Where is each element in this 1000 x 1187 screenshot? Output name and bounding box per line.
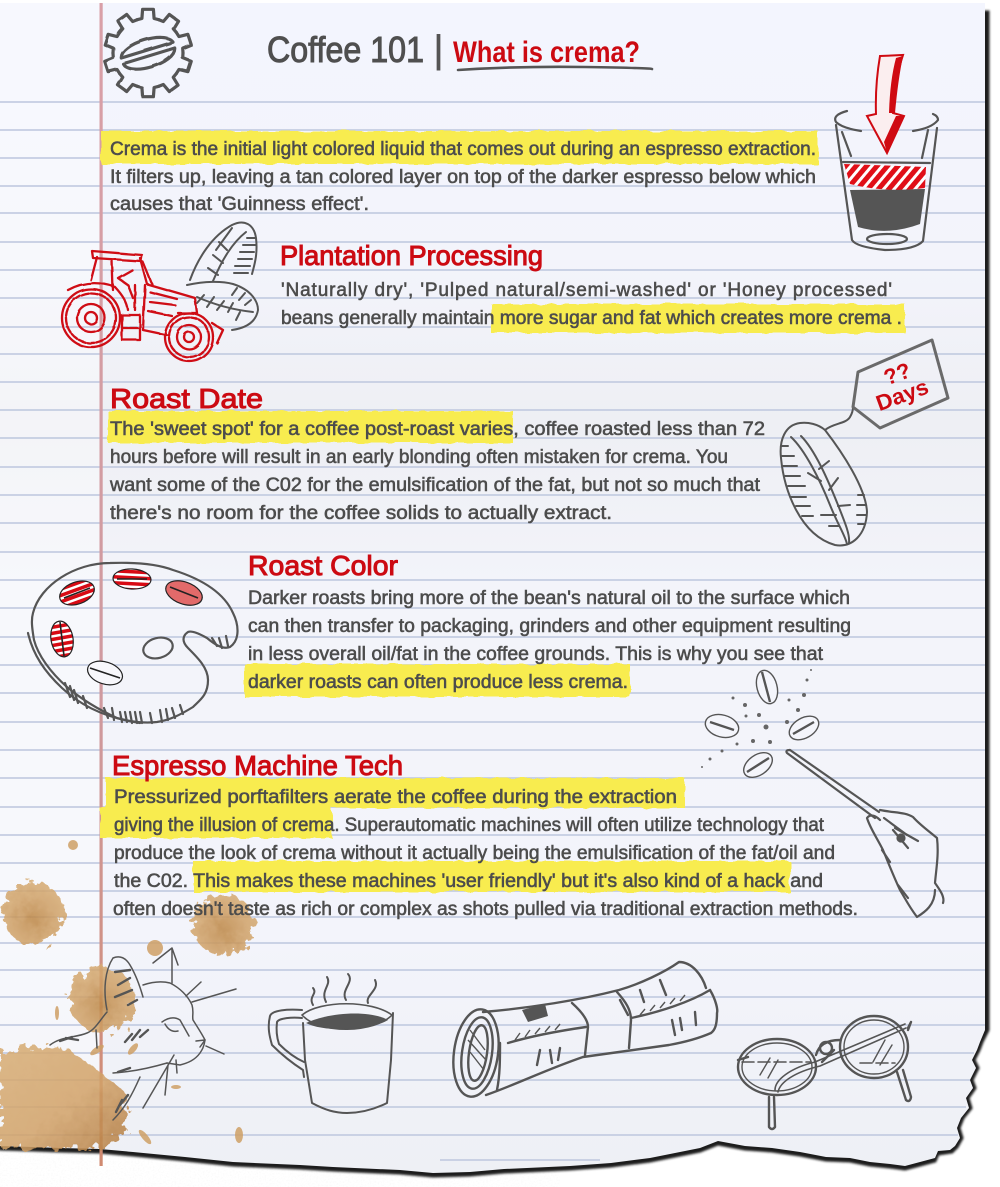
text block: roast color: can then transfer to packaging, grinders and other equipment resulting [248, 616, 851, 637]
icon: bean with days tag [781, 340, 948, 545]
icon: bean with days tag: Days [872, 374, 932, 416]
icon: eyeglasses [738, 1016, 911, 1129]
heading: roast color: Roast Color [248, 550, 398, 581]
text block: crema definition: Crema is the initial light colored liquid that comes out during an espresso extraction. [110, 139, 816, 160]
text block: roast color: darker roasts can often produce less crema. [248, 672, 628, 693]
title: Coffee 101 [267, 29, 424, 70]
icon: coffee bean gear [103, 9, 193, 97]
coffee stains [0, 840, 254, 1148]
icon: espresso shot glass with arrow [835, 55, 938, 250]
icon: cat [50, 948, 236, 1120]
icon: scattered coffee beans [701, 668, 823, 782]
text block: roast date [109, 419, 765, 524]
text block: plantation processing [281, 280, 902, 329]
text block: espresso machine tech: giving the illusion of crema. Superautomatic machines will often utilize technology that [114, 815, 825, 836]
icon: tractor and coffee beans [62, 223, 258, 361]
text block: espresso machine tech: the C02. This makes these machines 'user friendly' but it's also kind of a hack and [114, 871, 823, 892]
text block: espresso machine tech: Pressurized porftafilters aerate the coffee during the extraction [114, 787, 677, 808]
text block: espresso machine tech: often doesn't taste as rich or complex as shots pulled via traditional extraction methods. [113, 899, 858, 920]
text block: roast date: hours before will result in an early blonding often mistaken for crema. You [110, 447, 728, 468]
text block: roast date: there's no room for the coffee solids to actually extract. [110, 503, 612, 524]
title: What is crema? [453, 36, 640, 69]
heading: plantation processing: Plantation Processing [280, 240, 543, 271]
icon: paint palette with beans [28, 563, 238, 723]
text block: plantation processing: beans generally maintain more sugar and fat which creates more crema . [281, 308, 902, 329]
title [267, 29, 652, 71]
text block: roast color: in less overall oil/fat in the coffee grounds. This is why you see that [248, 644, 824, 665]
text block: plantation processing: 'Naturally dry', 'Pulped natural/semi-washed' or 'Honey processed' [281, 280, 892, 301]
icon: rolled newspaper [448, 962, 717, 1100]
title: | [434, 29, 443, 71]
text block: espresso machine tech [113, 787, 858, 920]
icon: bean with days tag: ?? [880, 358, 914, 390]
text block: crema definition: It filters up, leaving a tan colored layer on top of the darker espresso below which [110, 167, 816, 188]
text block: roast date: The 'sweet spot' for a coffee post-roast varies, coffee roasted less than 72 [110, 419, 765, 440]
text block: crema definition: causes that 'Guinness effect'. [110, 194, 369, 215]
highlights [100, 131, 905, 892]
icon: hand holding stir stick [786, 750, 943, 917]
heading: roast date: Roast Date [110, 383, 263, 414]
heading: espresso machine tech: Espresso Machine Tech [112, 750, 403, 781]
text block: roast color: Darker roasts bring more of the bean's natural oil to the surface which [248, 588, 850, 609]
icon: coffee mug [269, 974, 393, 1113]
text block: roast color [248, 588, 851, 693]
text block: crema definition [110, 139, 816, 215]
text block: espresso machine tech: produce the look of crema without it actually being the emulsification of the fat/oil and [114, 843, 835, 864]
text block: roast date: want some of the C02 for the emulsification of the fat, but not so much that [109, 475, 761, 496]
speckled area under torn edge [0, 1145, 560, 1187]
